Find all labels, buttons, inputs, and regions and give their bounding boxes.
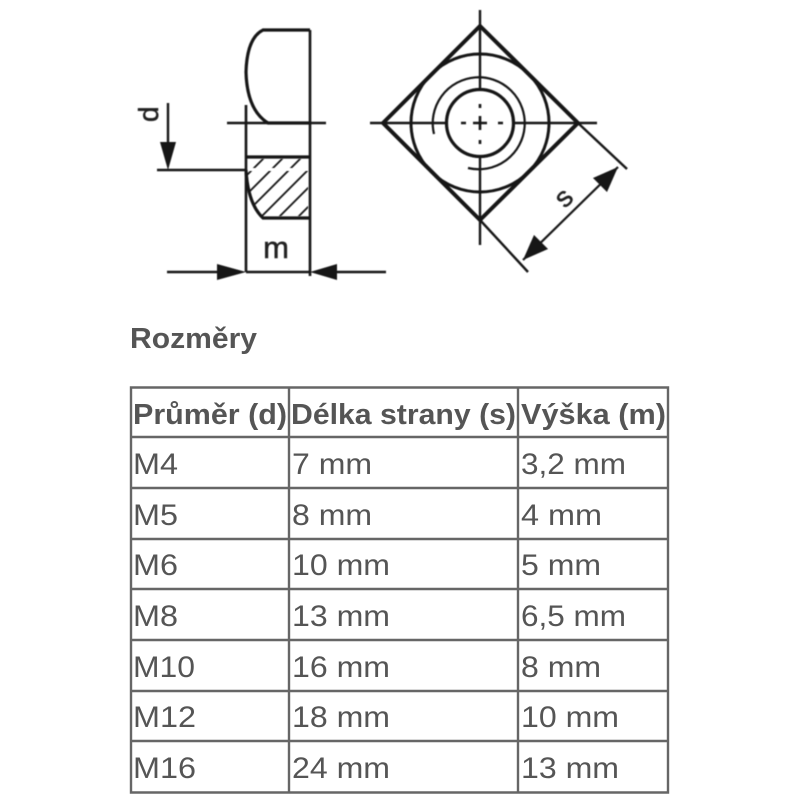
row M16: 24 mm xyxy=(292,752,390,785)
chamfer circle xyxy=(411,54,549,192)
header row: Průměr (d) xyxy=(133,399,287,431)
row M8: M8 xyxy=(133,600,178,633)
header row: Výška (m) xyxy=(521,399,666,431)
row M6: 5 mm xyxy=(521,549,601,582)
heading: Rozměry xyxy=(130,323,257,355)
dimension d: d xyxy=(133,106,164,122)
row M12: 10 mm xyxy=(521,701,619,734)
hatched section xyxy=(247,158,309,217)
row M12: 18 mm xyxy=(292,701,390,734)
dimension d xyxy=(133,103,246,170)
row M5: M5 xyxy=(133,499,178,532)
dimension m: m xyxy=(263,230,289,265)
centre lines xyxy=(370,10,597,245)
row M6: 10 mm xyxy=(292,549,390,582)
row M10: 8 mm xyxy=(521,651,601,684)
row M4: 3,2 mm xyxy=(521,448,626,481)
row M5: 4 mm xyxy=(521,499,602,532)
header row: Délka strany (s) xyxy=(291,399,516,431)
row M8 xyxy=(133,600,626,633)
row M5: 8 mm xyxy=(292,499,372,532)
hole circle xyxy=(446,90,514,156)
row M8: 6,5 mm xyxy=(521,600,626,633)
dimension s: s xyxy=(547,181,579,213)
dimensions table xyxy=(131,387,668,793)
row M12: M12 xyxy=(133,701,196,734)
side view drawing of nut xyxy=(133,30,386,280)
nut side profile xyxy=(246,30,310,276)
row M6: M6 xyxy=(133,549,178,582)
header row xyxy=(133,399,666,431)
row M12 xyxy=(133,701,619,734)
row M10 xyxy=(133,651,601,684)
row M6 xyxy=(133,549,601,582)
dimension m xyxy=(167,230,386,280)
thread arc xyxy=(433,77,525,169)
row M4 xyxy=(133,448,626,481)
row M16: 13 mm xyxy=(521,752,619,785)
square nut outline xyxy=(383,26,578,220)
row M16: M16 xyxy=(133,752,196,785)
row M4: 7 mm xyxy=(292,448,372,481)
row M5 xyxy=(133,499,602,532)
dimension s xyxy=(480,123,627,272)
centre dots xyxy=(461,104,503,144)
row M10: 16 mm xyxy=(292,651,390,684)
row M8: 13 mm xyxy=(292,600,390,633)
centre line xyxy=(227,122,326,124)
row M10: M10 xyxy=(133,651,195,684)
table grid xyxy=(131,387,668,793)
row M4: M4 xyxy=(133,448,178,481)
front view drawing of nut xyxy=(370,10,627,272)
row M16 xyxy=(133,752,619,785)
